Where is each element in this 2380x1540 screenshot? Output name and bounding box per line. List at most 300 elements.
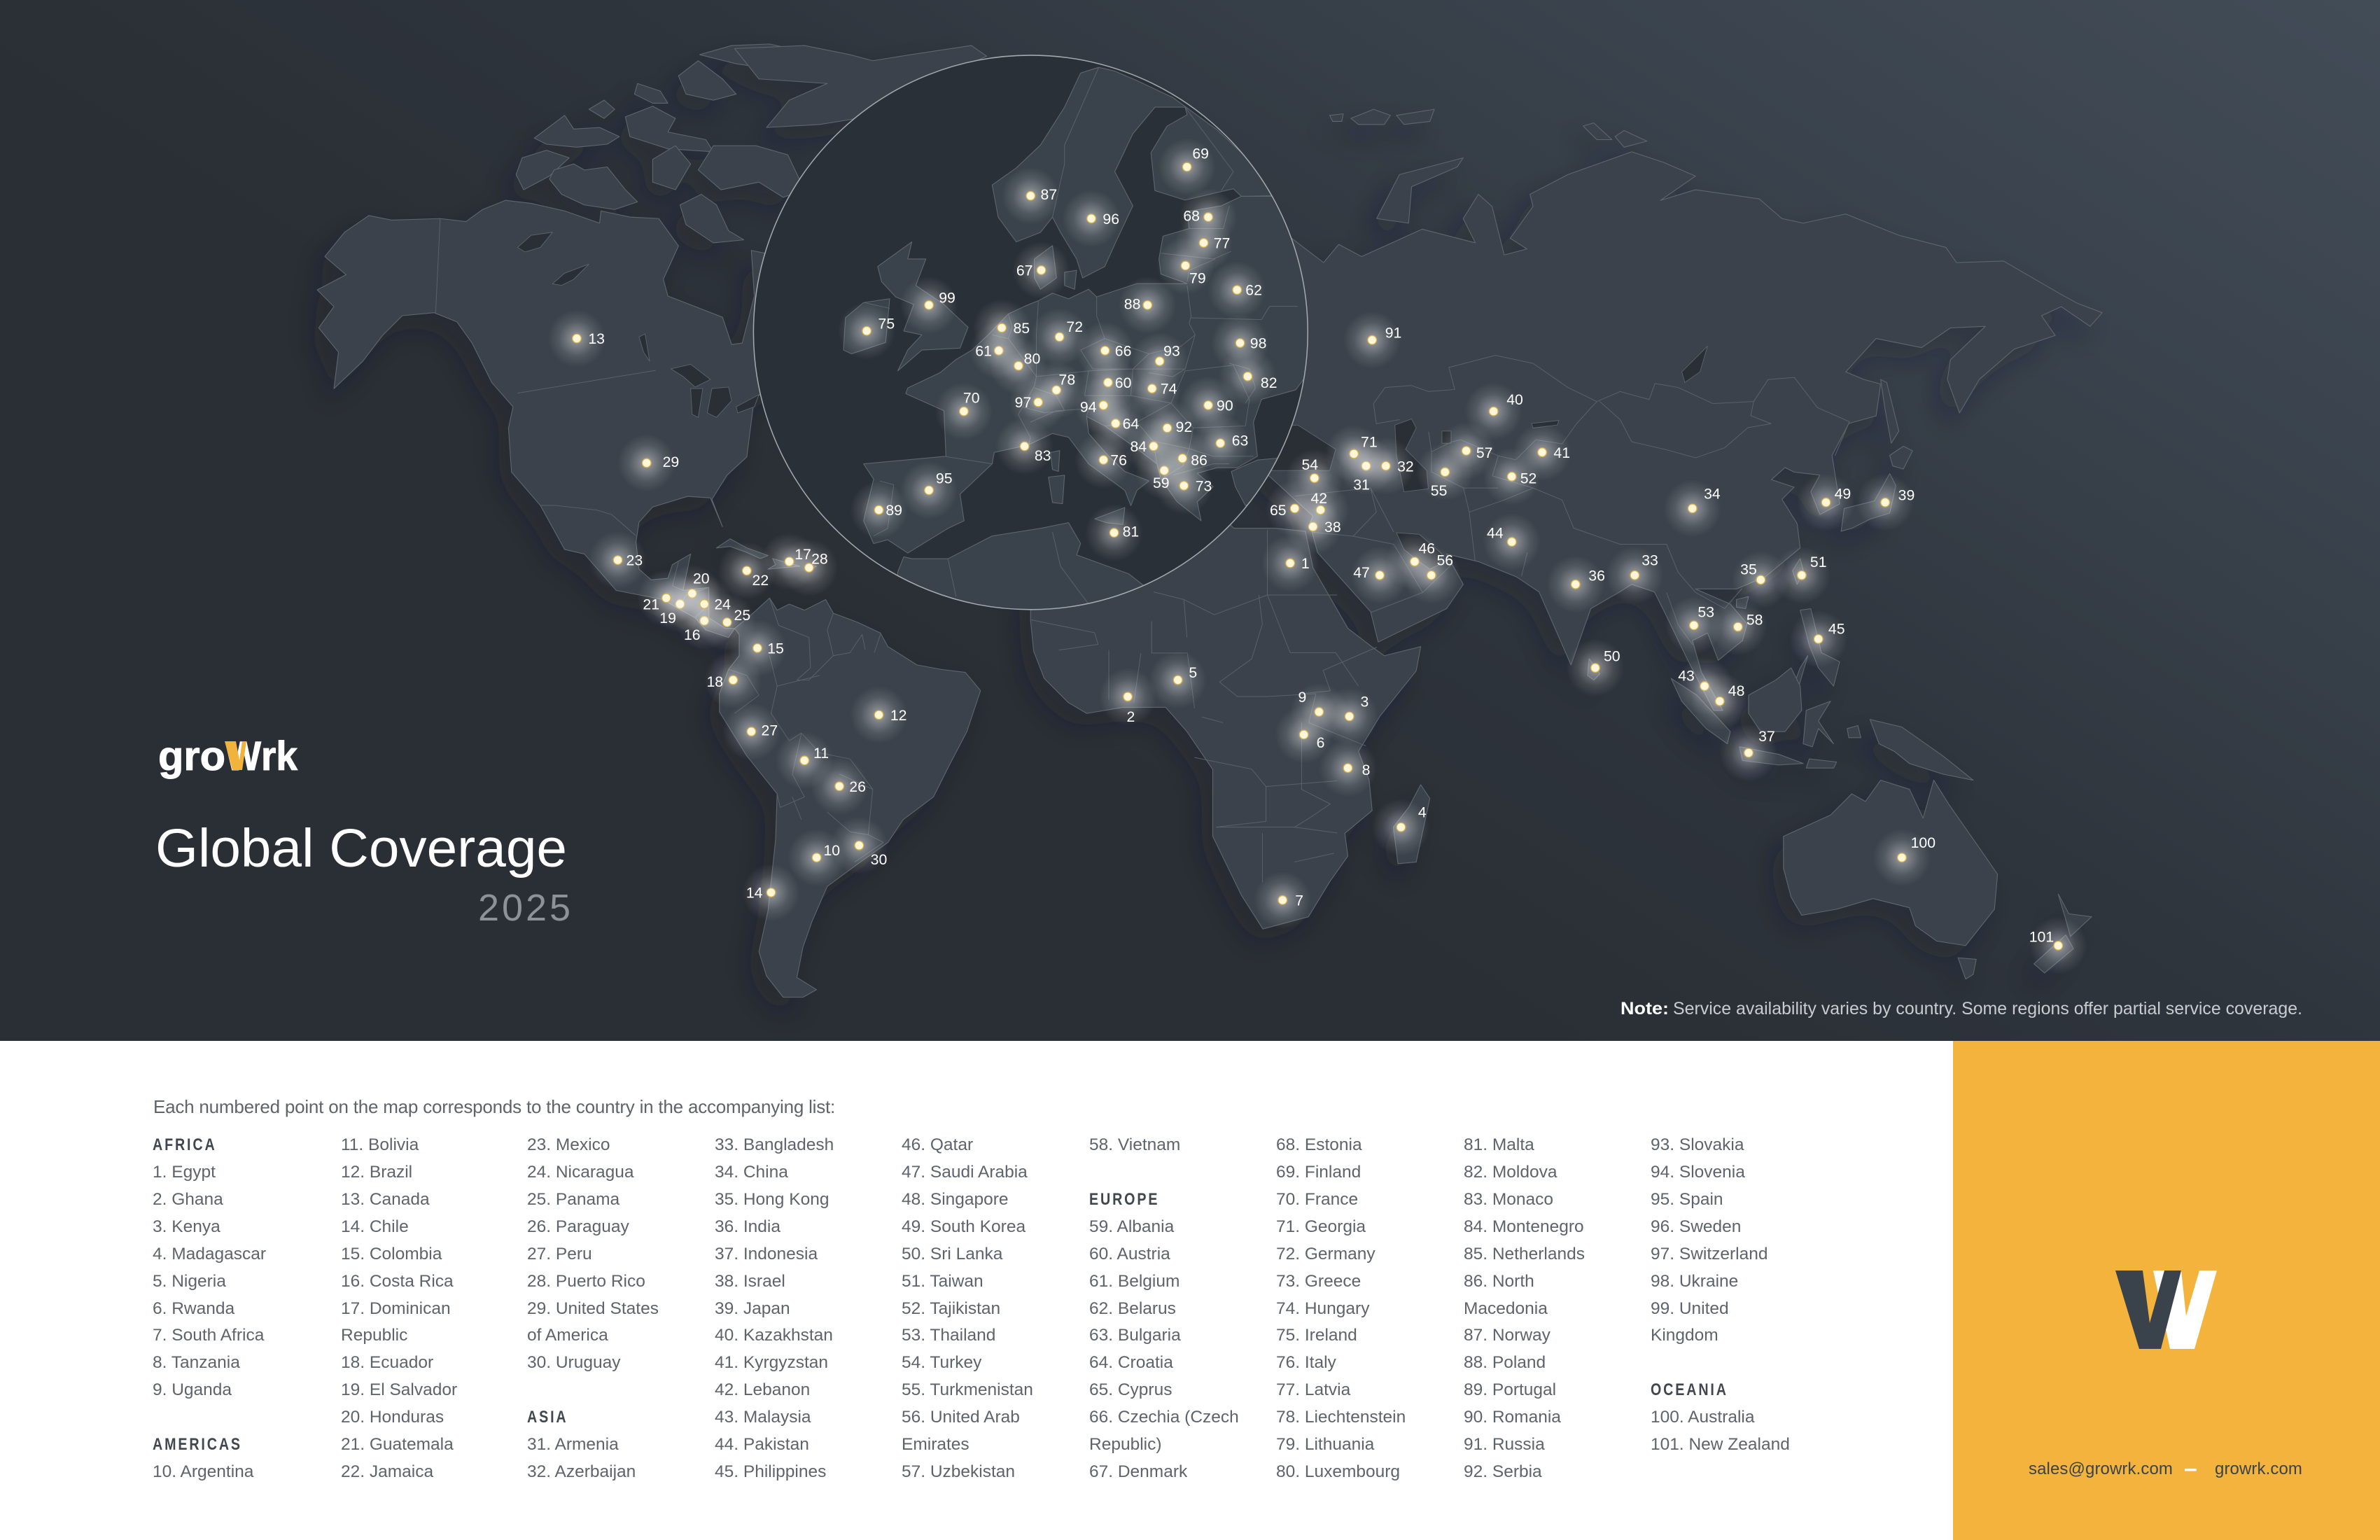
pin: Poland bbox=[1119, 276, 1176, 334]
pin: United Kingdom bbox=[900, 276, 958, 334]
country list column 5: 50. Sri Lanka bbox=[902, 1245, 1002, 1264]
country list column 4 bbox=[715, 1135, 834, 1481]
country list column 2: 19. El Salvador bbox=[341, 1380, 457, 1399]
service note: Service availability varies by country. Some regions offer partial service coverage. bbox=[1673, 999, 2302, 1018]
pin: Azerbaijan: 32 bbox=[1397, 458, 1414, 475]
pin: Netherlands bbox=[973, 299, 1030, 357]
pin: Costa Rica bbox=[676, 592, 733, 650]
country list column 1: 2. Ghana bbox=[153, 1190, 223, 1209]
pin: Uganda bbox=[1290, 683, 1348, 741]
country list column 1: AFRICA bbox=[153, 1135, 217, 1154]
pin: Dominican Republic bbox=[760, 533, 818, 590]
pin: Argentina bbox=[788, 829, 846, 886]
country list column 6: EUROPE bbox=[1089, 1190, 1159, 1209]
pin: South Korea bbox=[1797, 474, 1855, 531]
pin: Israel bbox=[1284, 498, 1342, 556]
Eurasia outside the circle bbox=[1214, 152, 2102, 710]
icon: W logo mark bbox=[2115, 1270, 2217, 1349]
pin: Russia: 91 bbox=[1385, 324, 1401, 341]
country list column 6 bbox=[1089, 1135, 1239, 1481]
country list column 3: of America bbox=[527, 1326, 608, 1345]
country list column 4: 36. India bbox=[715, 1217, 780, 1236]
pin: Brazil: 12 bbox=[890, 707, 906, 724]
pin: Taiwan: 51 bbox=[1810, 554, 1827, 570]
world land masses bbox=[317, 44, 2102, 997]
country list column 5: 56. United Arab bbox=[902, 1408, 1020, 1427]
pin: Jamaica: 22 bbox=[752, 572, 769, 589]
pin: Argentina: 10 bbox=[823, 842, 840, 859]
country list column 8: 81. Malta bbox=[1464, 1135, 1534, 1154]
pin: Puerto Rico: 28 bbox=[811, 551, 828, 568]
pin: India: 36 bbox=[1588, 567, 1605, 584]
country list column 6: 63. Bulgaria bbox=[1089, 1326, 1181, 1345]
pin: Bolivia bbox=[776, 732, 833, 790]
pin: Cyprus: 65 bbox=[1270, 502, 1287, 519]
pin: Colombia bbox=[729, 620, 786, 677]
country list column 9: 96. Sweden bbox=[1651, 1217, 1741, 1236]
country list column 4: 37. Indonesia bbox=[715, 1245, 818, 1264]
pin: Liechtenstein bbox=[1028, 361, 1085, 419]
country list column 6: Republic) bbox=[1089, 1435, 1162, 1454]
country list column 5: 48. Singapore bbox=[902, 1190, 1009, 1209]
pin: Nicaragua bbox=[676, 575, 733, 633]
pin: Malta: 81 bbox=[1123, 524, 1139, 540]
country list column 2: 17. Dominican bbox=[341, 1299, 451, 1318]
pin: Chile: 14 bbox=[746, 885, 763, 902]
pin: Moldova bbox=[1219, 348, 1278, 405]
country list column 8: 84. Montenegro bbox=[1464, 1217, 1584, 1236]
country list column 3: 32. Azerbaijan bbox=[527, 1462, 636, 1481]
Great Britain bbox=[878, 242, 968, 371]
contact details: sales@growrk.com bbox=[2029, 1460, 2173, 1478]
Tasmania bbox=[1958, 958, 1976, 979]
pin: Guatemala bbox=[638, 569, 695, 627]
country list column 7: 69. Finland bbox=[1276, 1163, 1361, 1182]
Scandinavia and Finland bbox=[991, 67, 1271, 279]
country list column 4: 44. Pakistan bbox=[715, 1435, 809, 1454]
western Turkey bbox=[1231, 458, 1277, 506]
pin: Australia bbox=[1873, 829, 1935, 886]
pin: Romania bbox=[1180, 377, 1237, 434]
pin: China bbox=[1664, 479, 1721, 538]
pin: China: 34 bbox=[1704, 485, 1721, 502]
pin: Albania bbox=[1135, 442, 1193, 499]
pin: Lithuania: 79 bbox=[1189, 270, 1206, 286]
Arctic islands and Greenland bbox=[516, 44, 986, 243]
country list column 4: 40. Kazakhstan bbox=[715, 1326, 833, 1345]
country list column 1: 7. South Africa bbox=[153, 1326, 264, 1345]
country list column 3: 26. Paraguay bbox=[527, 1217, 629, 1236]
country list column 2: 20. Honduras bbox=[341, 1408, 444, 1427]
country list column 4: 43. Malaysia bbox=[715, 1408, 811, 1427]
pin: Italy bbox=[1074, 431, 1133, 489]
country list column 5: 49. South Korea bbox=[902, 1217, 1026, 1236]
country list column 7: 70. France bbox=[1276, 1190, 1358, 1209]
pin: Turkmenistan: 55 bbox=[1431, 482, 1447, 499]
pin: Bolivia: 11 bbox=[813, 745, 829, 762]
pin: Indonesia bbox=[1720, 724, 1777, 782]
country list column 3: 27. Peru bbox=[527, 1245, 592, 1264]
New Zealand bbox=[2034, 894, 2092, 973]
pin: Estonia: 68 bbox=[1183, 207, 1200, 224]
pin: France bbox=[935, 382, 993, 440]
pin: Tajikistan bbox=[1483, 448, 1541, 505]
pin: Kyrgyzstan: 41 bbox=[1553, 444, 1570, 461]
pin: Spain: 95 bbox=[936, 470, 953, 487]
pin: Denmark bbox=[1012, 241, 1070, 299]
country list column 4: 38. Israel bbox=[715, 1272, 785, 1291]
service note: Note: bbox=[1620, 999, 1669, 1018]
country list column 2: 18. Ecuador bbox=[341, 1353, 433, 1372]
pin: Czechia: 66 bbox=[1115, 342, 1131, 359]
country list column 6: 64. Croatia bbox=[1089, 1353, 1173, 1372]
pin: Liechtenstein: 78 bbox=[1059, 372, 1075, 388]
pin: Belgium bbox=[970, 322, 1028, 379]
country list column 9: OCEANIA bbox=[1651, 1380, 1728, 1399]
country list column 8: 87. Norway bbox=[1464, 1326, 1550, 1345]
pin: Rwanda bbox=[1275, 706, 1333, 764]
pin: Panama: 25 bbox=[734, 607, 750, 624]
pin: Puerto Rico bbox=[780, 539, 838, 596]
country list column 2 bbox=[341, 1135, 457, 1481]
pin: Estonia bbox=[1180, 188, 1237, 246]
pin: Belarus bbox=[1208, 261, 1266, 318]
pin: Peru: 27 bbox=[762, 722, 778, 739]
pin: United Arab Emirates: 56 bbox=[1436, 552, 1453, 569]
pin: Egypt: 1 bbox=[1301, 555, 1310, 572]
country list column 6: 67. Denmark bbox=[1089, 1462, 1187, 1481]
country list column 7: 73. Greece bbox=[1276, 1272, 1361, 1291]
pin: United States: 29 bbox=[663, 454, 679, 470]
pin: Lebanon: 42 bbox=[1310, 490, 1327, 507]
pin: Norway: 87 bbox=[1041, 186, 1057, 203]
pin: Denmark: 67 bbox=[1016, 262, 1032, 279]
pin: Taiwan bbox=[1773, 547, 1830, 604]
country list column 8: 89. Portugal bbox=[1464, 1380, 1556, 1399]
country list column 9 bbox=[1651, 1135, 1790, 1454]
country list column 9: Kingdom bbox=[1651, 1326, 1718, 1345]
pin: Sri Lanka bbox=[1567, 639, 1624, 696]
pin: Croatia: 64 bbox=[1123, 416, 1139, 433]
country list column 9: 97. Switzerland bbox=[1651, 1245, 1768, 1264]
country list column 3: 23. Mexico bbox=[527, 1135, 610, 1154]
country list column 1: 9. Uganda bbox=[153, 1380, 232, 1399]
pin: Luxembourg bbox=[990, 337, 1047, 395]
North Africa bbox=[897, 522, 1144, 609]
year: 2025 bbox=[478, 887, 570, 929]
pin: Indonesia: 37 bbox=[1758, 728, 1775, 745]
pin: Cyprus bbox=[1266, 479, 1324, 538]
pin: Austria: 60 bbox=[1115, 374, 1131, 391]
pin: South Africa: 7 bbox=[1295, 892, 1303, 909]
country list column 2: Republic bbox=[341, 1326, 407, 1345]
pin: Paraguay: 26 bbox=[849, 778, 866, 795]
country list column 4: 33. Bangladesh bbox=[715, 1135, 834, 1154]
country list column 4: 45. Philippines bbox=[715, 1462, 826, 1481]
pin: Montenegro bbox=[1125, 417, 1182, 475]
country list column 2: 11. Bolivia bbox=[341, 1135, 419, 1154]
pin: Nigeria: 5 bbox=[1189, 664, 1197, 681]
pin: Vietnam: 58 bbox=[1746, 611, 1763, 628]
country list column 8: 83. Monaco bbox=[1464, 1190, 1553, 1209]
Madagascar bbox=[1394, 785, 1430, 864]
pin: Turkey: 54 bbox=[1301, 456, 1318, 473]
country list column 5: 51. Taiwan bbox=[902, 1272, 983, 1291]
country list column 2: 16. Costa Rica bbox=[341, 1272, 454, 1291]
pin: Australia: 100 bbox=[1911, 834, 1935, 851]
pin: Japan: 39 bbox=[1898, 486, 1914, 503]
country list column 7: 80. Luxembourg bbox=[1276, 1462, 1400, 1481]
pin: Armenia bbox=[1337, 437, 1395, 495]
pin: South Korea: 49 bbox=[1835, 485, 1851, 502]
country list column 7: 71. Georgia bbox=[1276, 1217, 1366, 1236]
pin: Malaysia bbox=[1676, 657, 1733, 715]
pin: India bbox=[1547, 556, 1605, 613]
country list column 5: 54. Turkey bbox=[902, 1353, 981, 1372]
pin: South Africa bbox=[1254, 872, 1311, 929]
pin: Kazakhstan bbox=[1464, 382, 1523, 440]
pin: Ireland: 75 bbox=[878, 315, 895, 332]
pin: Chile bbox=[742, 864, 800, 921]
Caribbean islands bbox=[716, 539, 817, 569]
country list column 8: 90. Romania bbox=[1464, 1408, 1561, 1427]
logo: groWrk: W bbox=[225, 734, 261, 779]
pin: New Zealand: 101 bbox=[2029, 928, 2054, 945]
country list column 7: 75. Ireland bbox=[1276, 1326, 1357, 1345]
pin: Poland: 88 bbox=[1124, 295, 1140, 312]
pin: Slovakia bbox=[1130, 332, 1189, 390]
country list column 6: 62. Belarus bbox=[1089, 1299, 1176, 1318]
country list column 5: 52. Tajikistan bbox=[902, 1299, 1000, 1318]
pin: Pakistan: 44 bbox=[1487, 525, 1504, 542]
pin: Hungary: 74 bbox=[1161, 381, 1177, 398]
Australia bbox=[1784, 780, 1998, 946]
pin: Greece bbox=[1155, 457, 1213, 514]
pin: Italy: 76 bbox=[1110, 452, 1127, 469]
intro text: Each numbered point on the map corresponds to the country in the accompanying list: bbox=[153, 1096, 835, 1117]
country list column 8 bbox=[1464, 1135, 1585, 1481]
pin: Serbia: 92 bbox=[1176, 419, 1192, 435]
pin: Romania: 90 bbox=[1217, 398, 1233, 414]
country list column 2: 21. Guatemala bbox=[341, 1435, 454, 1454]
country list column 3: ASIA bbox=[527, 1408, 568, 1427]
pin: Qatar: 46 bbox=[1418, 540, 1435, 556]
country list column 1: 1. Egypt bbox=[153, 1163, 216, 1182]
pin: Malaysia: 43 bbox=[1678, 668, 1695, 685]
country list column 6: 59. Albania bbox=[1089, 1217, 1174, 1236]
country list column 3: 29. United States bbox=[527, 1299, 659, 1318]
pin: Montenegro: 84 bbox=[1130, 438, 1147, 455]
pin: Ukraine bbox=[1211, 314, 1269, 372]
pin: Brazil bbox=[850, 686, 908, 744]
pin: Switzerland: 97 bbox=[1015, 394, 1031, 411]
pin: Turkmenistan bbox=[1416, 443, 1474, 501]
pin: Bulgaria bbox=[1191, 414, 1250, 472]
pin: Latvia: 77 bbox=[1214, 235, 1230, 252]
country list column 8: 92. Serbia bbox=[1464, 1462, 1542, 1481]
country list column 9: 98. Ukraine bbox=[1651, 1272, 1738, 1291]
country list column 7: 72. Germany bbox=[1276, 1245, 1376, 1264]
country list column 6: 65. Cyprus bbox=[1089, 1380, 1172, 1399]
pin: United Kingdom: 99 bbox=[939, 290, 955, 307]
country list column 4: 34. China bbox=[715, 1163, 788, 1182]
pin: Tajikistan: 52 bbox=[1520, 470, 1536, 487]
pin: Hungary bbox=[1124, 360, 1181, 417]
country list column 3 bbox=[527, 1135, 659, 1481]
country list column 7: 68. Estonia bbox=[1276, 1135, 1362, 1154]
country list column 2: 22. Jamaica bbox=[341, 1462, 433, 1481]
pin: Tanzania bbox=[1319, 739, 1377, 797]
hero background panel bbox=[0, 0, 2380, 1041]
contact details: – bbox=[2184, 1455, 2197, 1482]
country list column 2: 13. Canada bbox=[341, 1190, 430, 1209]
pin: Greece: 73 bbox=[1196, 477, 1212, 494]
South America bbox=[720, 598, 981, 997]
pin: Peru bbox=[722, 703, 780, 760]
pin: Russia bbox=[1343, 312, 1401, 369]
country list column 2: 12. Brazil bbox=[341, 1163, 412, 1182]
pin: Canada: 13 bbox=[588, 330, 605, 347]
country list column 8: 85. Netherlands bbox=[1464, 1245, 1585, 1264]
pin: Netherlands: 85 bbox=[1013, 320, 1030, 337]
country list column 8: 86. North bbox=[1464, 1272, 1534, 1291]
pin: Japan bbox=[1856, 474, 1914, 531]
pin: Ghana bbox=[1099, 668, 1156, 725]
pin: Georgia bbox=[1325, 425, 1382, 483]
country list column 5: 55. Turkmenistan bbox=[902, 1380, 1033, 1399]
pin: Lebanon bbox=[1292, 481, 1350, 539]
pin: Germany: 72 bbox=[1066, 318, 1083, 335]
logo: groWrk: rk bbox=[261, 734, 298, 779]
pin: Luxembourg: 80 bbox=[1024, 350, 1040, 367]
pin: Tanzania: 8 bbox=[1362, 762, 1370, 778]
pin: Vietnam bbox=[1709, 598, 1767, 656]
pin: Azerbaijan bbox=[1357, 437, 1415, 495]
country list column 9: 101. New Zealand bbox=[1651, 1435, 1790, 1454]
country list column 4: 42. Lebanon bbox=[715, 1380, 810, 1399]
pin: Israel: 38 bbox=[1324, 519, 1341, 536]
country list column 4: 41. Kyrgyzstan bbox=[715, 1353, 828, 1372]
pin: Moldova: 82 bbox=[1261, 374, 1278, 391]
pin: Germany bbox=[1030, 308, 1088, 366]
pin: Switzerland bbox=[1009, 373, 1067, 431]
country borders bbox=[435, 218, 1849, 882]
pin: United Arab Emirates bbox=[1403, 547, 1460, 604]
pin: Finland: 69 bbox=[1192, 146, 1209, 162]
country list column 1: 3. Kenya bbox=[153, 1217, 220, 1236]
country list column 6: 61. Belgium bbox=[1089, 1272, 1180, 1291]
pin: Ukraine: 98 bbox=[1250, 335, 1266, 352]
pin: Nigeria bbox=[1149, 651, 1207, 709]
country list column 5: 53. Thailand bbox=[902, 1326, 995, 1345]
country list column 8: 91. Russia bbox=[1464, 1435, 1545, 1454]
pin: Kenya: 3 bbox=[1360, 693, 1368, 710]
pin: Slovenia bbox=[1074, 377, 1133, 434]
pin: Bangladesh: 33 bbox=[1642, 552, 1658, 569]
pin: New Zealand bbox=[2029, 917, 2087, 974]
pin: Ecuador bbox=[704, 651, 762, 709]
country list column 4: 35. Hong Kong bbox=[715, 1190, 829, 1209]
pin: Uruguay bbox=[830, 817, 888, 874]
pin: Austria bbox=[1079, 354, 1137, 412]
country list column 1: 8. Tanzania bbox=[153, 1353, 240, 1372]
pin: Nicaragua: 24 bbox=[714, 596, 731, 613]
pin: Mexico bbox=[589, 531, 647, 589]
pin: Slovenia: 94 bbox=[1080, 399, 1097, 416]
country list column 6: 58. Vietnam bbox=[1089, 1135, 1180, 1154]
country list column 9: 93. Slovakia bbox=[1651, 1135, 1744, 1154]
pin: Uganda: 9 bbox=[1298, 689, 1306, 706]
country list column 7: 74. Hungary bbox=[1276, 1299, 1369, 1318]
pin: Ireland bbox=[838, 302, 895, 360]
pin: Saudi Arabia bbox=[1351, 547, 1408, 604]
pin: Jamaica bbox=[718, 542, 776, 600]
pin: Guatemala: 21 bbox=[643, 596, 659, 613]
country list column 5: Emirates bbox=[902, 1435, 969, 1454]
country list column 4: 39. Japan bbox=[715, 1299, 790, 1318]
country list column 3: 31. Armenia bbox=[527, 1435, 619, 1454]
pin: Uzbekistan: 57 bbox=[1476, 444, 1492, 461]
pin: Pakistan bbox=[1483, 513, 1541, 570]
pin: Rwanda: 6 bbox=[1317, 734, 1324, 751]
pin: Albania: 59 bbox=[1153, 475, 1170, 491]
lakes and inland seas bbox=[517, 232, 1707, 569]
European borders bbox=[864, 67, 1298, 604]
country list column 5: 47. Saudi Arabia bbox=[902, 1163, 1028, 1182]
pin: North Macedonia bbox=[1154, 430, 1211, 487]
pin: Uruguay: 30 bbox=[871, 851, 887, 868]
pin: Philippines: 45 bbox=[1828, 620, 1845, 637]
pin: Belgium: 61 bbox=[975, 342, 992, 359]
pin: Lithuania bbox=[1156, 237, 1214, 295]
pin: Panama bbox=[698, 594, 756, 651]
country list column 3: 30. Uruguay bbox=[527, 1353, 620, 1372]
pin: Belarus: 62 bbox=[1245, 282, 1262, 299]
world map bbox=[155, 43, 2302, 1018]
pin: Honduras: 20 bbox=[693, 570, 710, 587]
pin: Norway bbox=[1002, 167, 1060, 225]
Mediterranean islands bbox=[1049, 270, 1125, 524]
pin: Malta bbox=[1085, 504, 1143, 561]
country list column 1 bbox=[153, 1135, 266, 1481]
pin: Sri Lanka: 50 bbox=[1604, 648, 1620, 664]
country list column 7: 76. Italy bbox=[1276, 1353, 1336, 1372]
pin: Kenya bbox=[1320, 687, 1378, 746]
pin: Singapore bbox=[1691, 673, 1749, 730]
gold contact panel bbox=[1953, 1041, 2380, 1540]
country list column 5: 57. Uzbekistan bbox=[902, 1462, 1015, 1481]
title: Global Coverage bbox=[155, 818, 567, 878]
Ireland bbox=[844, 299, 890, 354]
Denmark bbox=[1035, 246, 1056, 289]
pin: Monaco bbox=[995, 417, 1054, 475]
country list column 8: 88. Poland bbox=[1464, 1353, 1546, 1372]
country list column 9: 100. Australia bbox=[1651, 1408, 1754, 1427]
country list column 3: 25. Panama bbox=[527, 1190, 620, 1209]
pin: Czechia bbox=[1076, 322, 1134, 379]
pin: Portugal: 89 bbox=[886, 502, 902, 519]
pin: Costa Rica: 16 bbox=[684, 626, 701, 643]
country list column 5 bbox=[902, 1135, 1033, 1481]
pin: Saudi Arabia: 47 bbox=[1353, 564, 1370, 581]
North America bbox=[317, 200, 820, 638]
pin: Croatia bbox=[1087, 395, 1144, 452]
logo: groWrk: gro bbox=[158, 734, 225, 779]
pin: Sweden: 96 bbox=[1102, 211, 1119, 227]
pin: El Salvador: 19 bbox=[659, 610, 676, 626]
Asian and Oceanian islands bbox=[1329, 109, 1973, 780]
country list column 7: 78. Liechtenstein bbox=[1276, 1408, 1406, 1427]
